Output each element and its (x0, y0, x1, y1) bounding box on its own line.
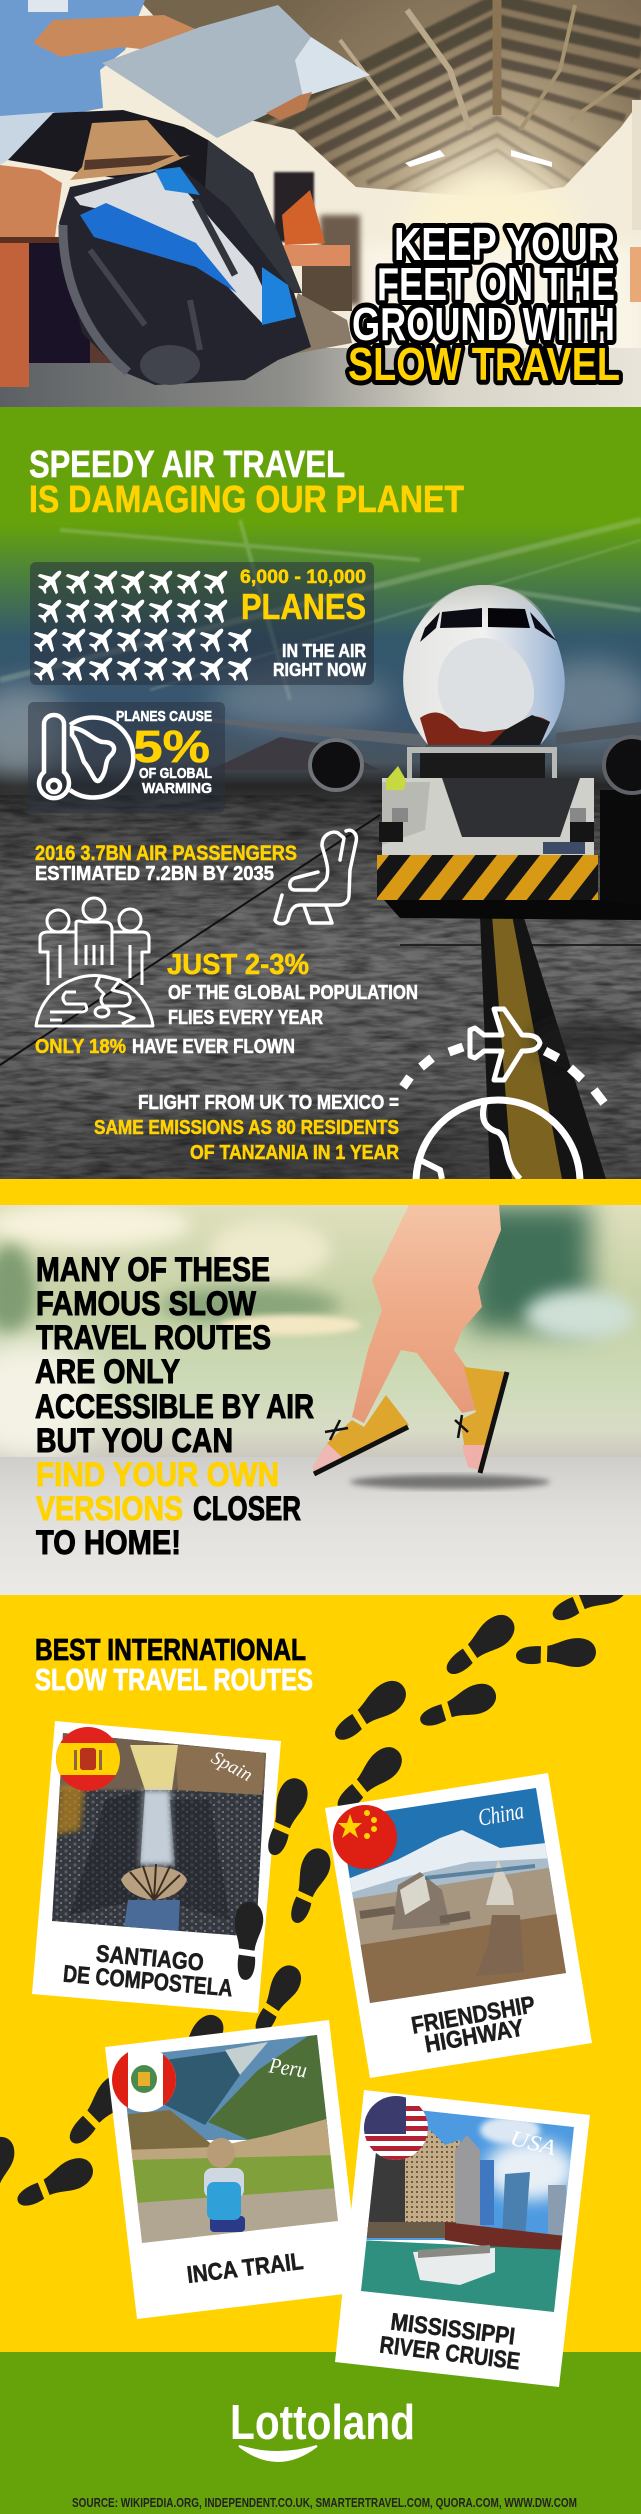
icon: aircraft seat (275, 830, 356, 924)
china name: China (476, 1798, 526, 1832)
panel: global warming: 5% (133, 721, 210, 772)
map (102, 5, 370, 138)
footer band (0, 2352, 641, 2514)
route label: INCA TRAIL (185, 2248, 305, 2289)
peru photo (115, 2030, 345, 2245)
trousers (8, 110, 302, 293)
message: BUT YOU CAN (36, 1422, 233, 1460)
shadow (350, 1475, 550, 1489)
shoe (292, 293, 352, 354)
hat (70, 120, 190, 180)
message: FAMOUS SLOW (36, 1285, 257, 1323)
route label: HIGHWAY (423, 2014, 526, 2058)
panel: planes in the air (28, 562, 374, 687)
panel: global warming: OF GLOBAL (139, 765, 212, 782)
background traveller (274, 172, 360, 311)
spain photo (52, 1733, 266, 1936)
message: CLOSER (193, 1490, 301, 1528)
route label: DE COMPOSTELA (62, 1961, 234, 2002)
contrails and clouds (0, 520, 641, 775)
panel: global warming (28, 702, 225, 813)
hero title (348, 218, 620, 390)
emissions stat: FLIGHT FROM UK TO MEXICO = (138, 1092, 399, 1114)
emissions stat: OF TANZANIA IN 1 YEAR (190, 1142, 399, 1164)
icon: globe with flight path (399, 1006, 608, 1179)
panel: peru postcard (105, 2020, 361, 2319)
route label: MISSISSIPPI (389, 2308, 516, 2351)
station ceiling (143, 0, 641, 194)
route label (409, 1991, 537, 2058)
panel: planes in the air: IN THE AIR (282, 641, 366, 661)
yellow divider band (0, 1179, 641, 1205)
shoes (313, 1367, 507, 1474)
population stat: JUST 2-3% (167, 949, 309, 981)
route label: SANTIAGO (95, 1940, 205, 1977)
emissions stat: SAME EMISSIONS AS 80 RESIDENTS (94, 1117, 399, 1139)
china photo (347, 1788, 566, 2003)
panel: global warming: PLANES CAUSE (116, 708, 212, 725)
message: MANY OF THESE (36, 1251, 270, 1289)
section heading: IS DAMAGING OUR PLANET (29, 479, 464, 521)
population stat: OF THE GLOBAL POPULATION (168, 982, 418, 1004)
plane icon grid (34, 570, 252, 682)
panel: walking fingers photo (0, 1203, 641, 1595)
icon: thermometer and globe (39, 715, 133, 798)
panel: global warming: WARMING (142, 780, 212, 797)
pushback tug (377, 747, 641, 920)
message: VERSIONS (36, 1490, 183, 1528)
route label: FRIENDSHIP (409, 1991, 537, 2040)
population stat: ONLY 18% (35, 1036, 126, 1058)
spain name: Spain (208, 1747, 256, 1786)
panel: planes in the air: PLANES (241, 586, 366, 627)
route label (378, 2308, 521, 2375)
message: TO HOME! (36, 1524, 181, 1562)
shirt and arm (0, 0, 202, 165)
blurred garden background (0, 1203, 635, 1460)
routes heading: SLOW TRAVEL ROUTES (35, 1662, 313, 1697)
population stat: HAVE EVER FLOWN (132, 1036, 295, 1058)
section heading (30, 450, 464, 513)
hand (352, 1205, 501, 1423)
message (35, 1251, 314, 1562)
air passengers stat (35, 845, 296, 880)
route label: RIVER CRUISE (378, 2331, 521, 2375)
message: TRAVEL ROUTES (36, 1319, 271, 1357)
routes heading: BEST INTERNATIONAL (35, 1632, 306, 1667)
panel: planes in the air: 6,000 - 10,000 (240, 567, 366, 588)
panel: hero photo (0, 0, 641, 407)
route label (62, 1940, 234, 2002)
flag: peru (112, 2048, 176, 2112)
lights and bright end of hall (360, 100, 641, 365)
airplane (210, 585, 641, 793)
message: FIND YOUR OWN (36, 1456, 279, 1494)
flag: usa (364, 2096, 428, 2161)
flag: spain (56, 1727, 120, 1791)
footprints trail (0, 1566, 633, 2218)
message: ARE ONLY (35, 1353, 180, 1391)
floor (0, 348, 641, 407)
usa photo (358, 2100, 580, 2316)
panel: usa postcard (335, 2090, 590, 2387)
usa name: USA (508, 2125, 559, 2160)
section heading: SPEEDY AIR TRAVEL (29, 444, 345, 486)
panel: spain postcard (32, 1721, 281, 2013)
panel: planes in the air: RIGHT NOW (273, 660, 366, 680)
route section background (0, 1595, 641, 2352)
logo: lottoland: Lottoland (230, 2396, 415, 2450)
routes heading (35, 1632, 313, 1697)
air passengers stat: ESTIMATED 7.2BN BY 2035 (35, 863, 274, 885)
population stat: FLIES EVERY YEAR (168, 1007, 323, 1029)
backpack (59, 167, 311, 385)
icon: people on globe (36, 898, 153, 1026)
population stat (35, 949, 418, 1058)
peru name: Peru (267, 2052, 309, 2083)
flag: china (332, 1804, 398, 1870)
emissions stat (94, 1092, 399, 1164)
air passengers stat: 2016 3.7BN AIR PASSENGERS (35, 842, 297, 865)
bench (0, 165, 112, 387)
message: ACCESSIBLE BY AIR (35, 1388, 314, 1426)
panel: speedy air travel (0, 407, 641, 1264)
runway (0, 790, 641, 1185)
panel: china postcard (325, 1773, 592, 2078)
